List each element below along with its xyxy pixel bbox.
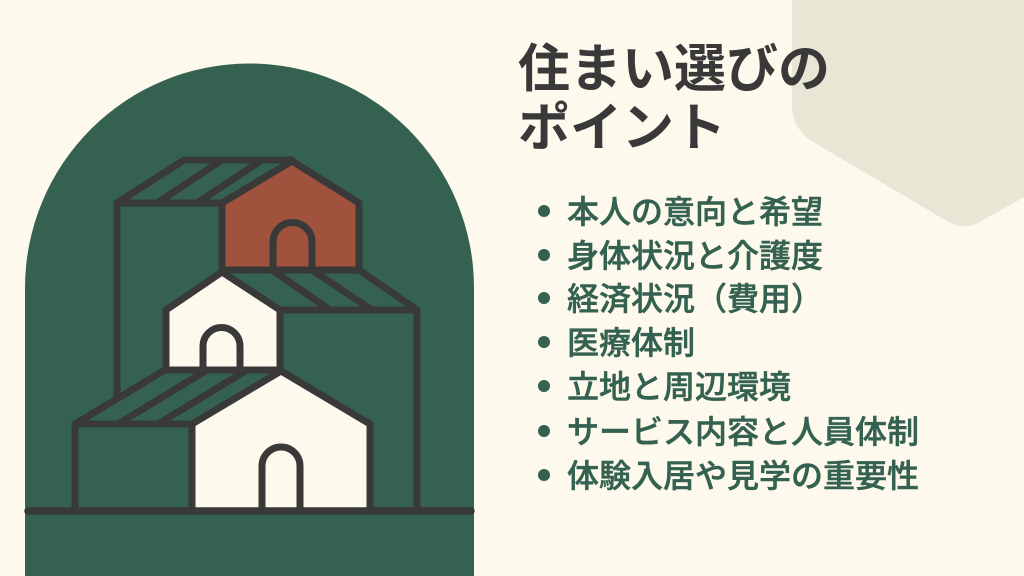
item 6: サービス内容と人員体制: [567, 414, 919, 450]
title: ポイント: [518, 100, 726, 158]
bullet list: [538, 194, 919, 494]
item 1: 本人の意向と希望: [567, 194, 823, 230]
item 5: 立地と周辺環境: [567, 369, 791, 405]
middle house with white gable: [166, 270, 417, 511]
item 4: 医療体制: [567, 325, 695, 361]
title: 住まい選びの: [518, 41, 830, 99]
item 3: 経済状況（費用）: [567, 281, 823, 317]
ground line: [28, 507, 471, 515]
item 2: 身体状況と介護度: [567, 238, 823, 274]
title: [518, 41, 830, 158]
item 7: 体験入居や見学の重要性: [567, 458, 919, 494]
bottom house with white gable: [75, 370, 370, 511]
top house with red gable: [117, 160, 359, 397]
